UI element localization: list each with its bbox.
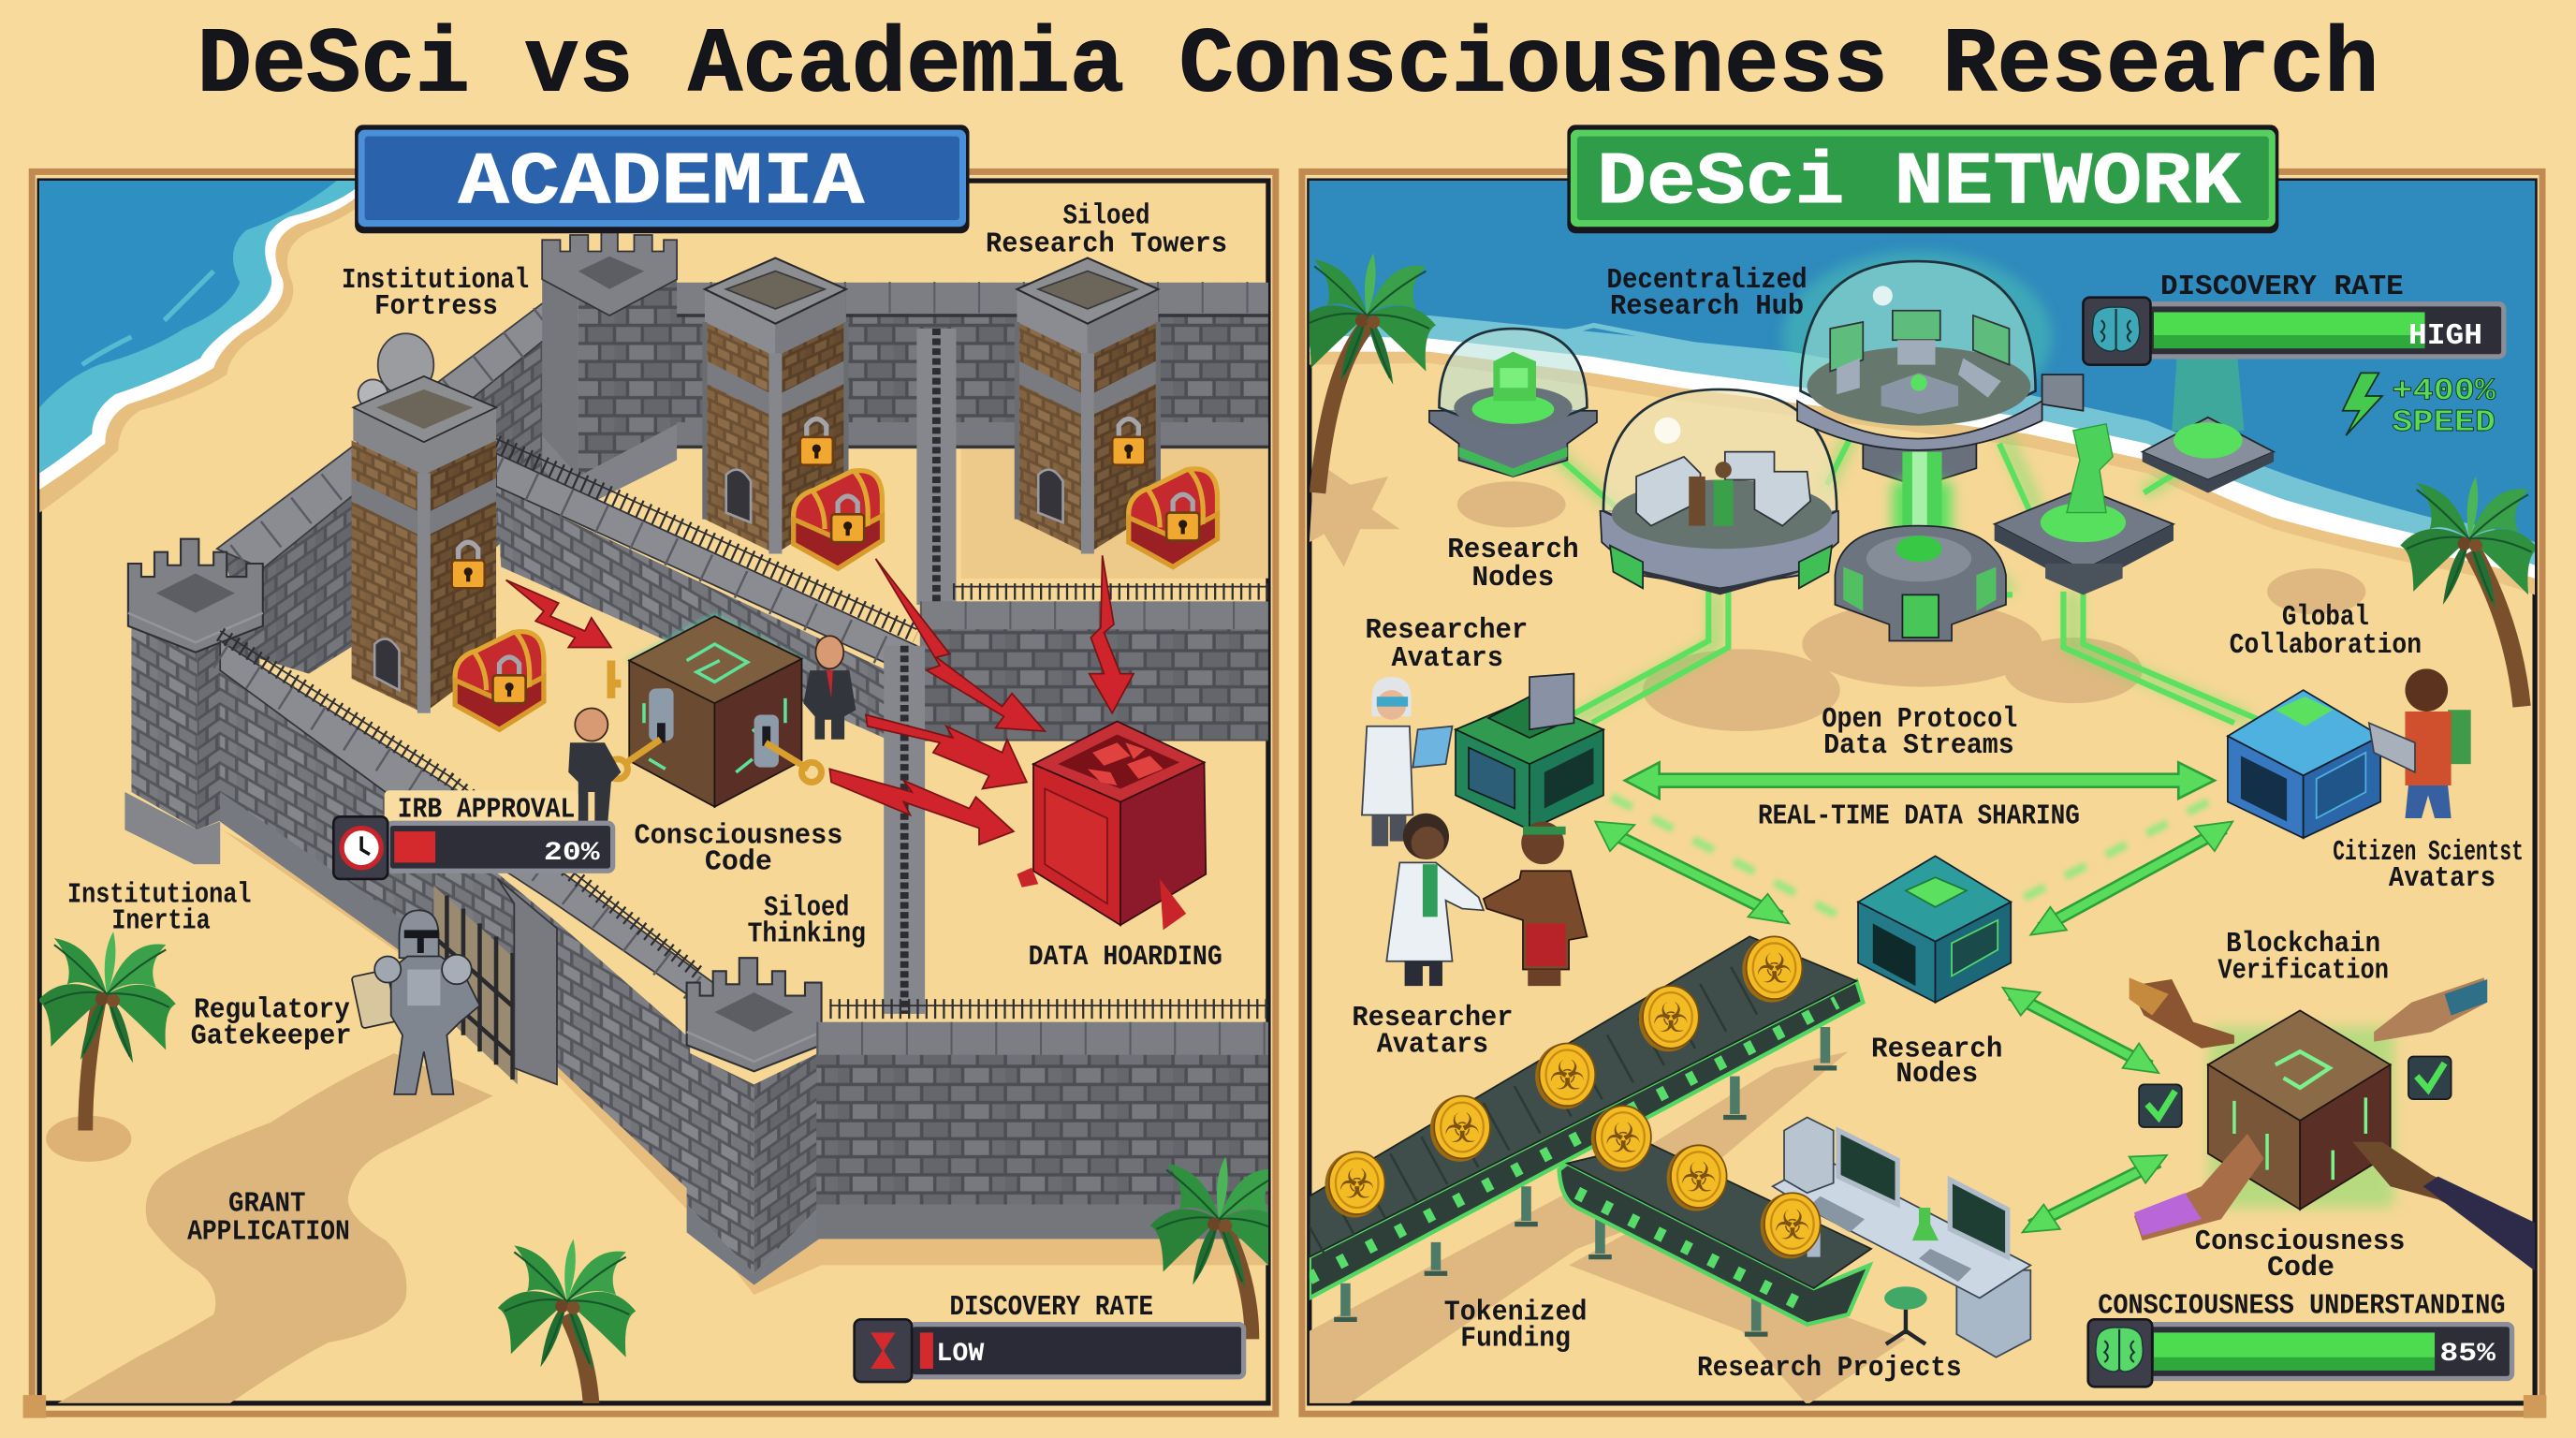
chest centre [794, 471, 882, 568]
sand shadows [1310, 460, 2365, 1405]
label: consciousness code [2195, 1225, 2405, 1284]
back wall [666, 283, 1268, 448]
palm right [2400, 477, 2539, 707]
label: institutional inertia: Institutional [67, 879, 252, 912]
chest right [1129, 469, 1218, 567]
small data platform [2143, 359, 2274, 493]
label: global collaboration: Collaboration [2230, 629, 2422, 662]
label: tokenized funding [1444, 1296, 1587, 1355]
siloed tower right [1017, 258, 1158, 553]
palm right [1150, 1157, 1288, 1339]
lock right [1112, 419, 1145, 465]
IRB approval bar [333, 790, 613, 879]
label: researcher avatars top: Avatars [1392, 642, 1503, 675]
label: institutional inertia [67, 879, 252, 938]
lock front [452, 542, 485, 588]
low discovery-rate bar [855, 1291, 1244, 1382]
arrow: right node to centre node [2030, 822, 2232, 935]
administrator figure right [803, 636, 856, 740]
label: researcher avatars bottom: Researcher [1352, 1002, 1513, 1034]
label: research projects: Research Projects [1697, 1352, 1962, 1385]
label: consciousness code: Consciousness [2195, 1225, 2405, 1258]
funding coin 4 [1639, 986, 1699, 1051]
icon: cyan brain [2092, 307, 2140, 351]
research workstations [1773, 1117, 2030, 1357]
label: global collaboration: Global [2282, 601, 2369, 634]
arrow: real-time data sharing [1625, 762, 2215, 799]
label: siloed thinking [748, 892, 866, 951]
consciousness understanding bar [2088, 1289, 2512, 1387]
banner: desci network: DeSci NETWORK [1597, 140, 2242, 225]
label: research nodes centre: Research [1871, 1034, 2002, 1066]
main research dome [1600, 389, 1838, 594]
label: grant application: APPLICATION [187, 1215, 350, 1248]
label: global collaboration [2230, 601, 2422, 662]
label: blockchain verification [2217, 928, 2389, 987]
conveyor research projects [1559, 1144, 1871, 1334]
panel: desci [1298, 171, 2546, 1418]
discovery rate bar high [2083, 271, 2504, 365]
funding coin 7 [1667, 1145, 1727, 1211]
red arrow 1 [506, 580, 611, 648]
funding coin 3 [1535, 1043, 1595, 1109]
red safe: data hoarding [1017, 721, 1206, 930]
label: consciousness code: Code [705, 845, 772, 878]
consciousness understanding bar: 85% [2439, 1340, 2496, 1369]
label: grant application [187, 1188, 350, 1248]
red arrow 3 [1090, 555, 1134, 713]
label: discovery rate: DISCOVERY RATE [949, 1291, 1153, 1324]
label: decentralized research hub: Research Hub [1610, 290, 1804, 323]
label: institutional fortress: Institutional [342, 264, 529, 297]
administrator figure left [568, 708, 621, 822]
panel frame: desci [1302, 171, 2546, 1418]
label: discovery rate: DISCOVERY RATE [2160, 271, 2404, 303]
scientist avatar [1362, 677, 1453, 846]
indigenous collaborator avatar [1484, 822, 1587, 986]
label: citizen scientist avatars: Avatars [2389, 862, 2496, 895]
label: consciousness code: Code [2267, 1252, 2334, 1284]
inner right wall [920, 587, 1268, 741]
inner diagonal wall [496, 439, 916, 740]
desci beach scene [1298, 181, 2539, 1405]
tower 1 with dish [352, 333, 496, 713]
academia beach scene [37, 181, 1288, 1406]
iron gate [433, 879, 557, 1084]
palm left [37, 932, 176, 1162]
funding coin 5 [1742, 936, 1802, 1003]
network node left [1456, 674, 1603, 829]
red arrow 4 [866, 714, 1027, 788]
panel frame: academia [23, 171, 1276, 1418]
label: open protocol data streams: Data Streams [1823, 729, 2014, 762]
network node centre [1858, 856, 2011, 1003]
label: regulatory gatekeeper: Regulatory [194, 993, 350, 1026]
palm left [1298, 253, 1436, 493]
data flow trails [1612, 797, 2208, 920]
banner: academia: ACADEMIA [459, 140, 865, 225]
label: regulatory gatekeeper [191, 993, 352, 1052]
icon: lightning bolt [2343, 373, 2382, 435]
red arrow 5 [829, 769, 1014, 844]
label: consciousness code: Consciousness [634, 819, 842, 852]
siloed tower centre [705, 258, 846, 553]
lock centre [800, 419, 833, 465]
label: siloed thinking: Thinking [748, 918, 866, 951]
label: institutional fortress: Fortress [374, 290, 498, 323]
banner: desci network [1567, 125, 2278, 233]
funding coin 2 [1430, 1096, 1490, 1162]
corner tower left [124, 539, 263, 864]
label: open protocol data streams: Open Protocol [1822, 703, 2017, 736]
chest front [455, 632, 544, 729]
conveyor tokenized funding [1310, 936, 1863, 1319]
front wall [816, 1005, 1268, 1239]
castle tower top [542, 230, 677, 509]
chain post [916, 329, 956, 605]
IRB label backing [385, 790, 578, 822]
corner tower right [687, 958, 822, 1284]
speed boost callout [2343, 373, 2496, 441]
red arrow 2 [875, 559, 1045, 731]
decentralized research hub dome [1782, 252, 2083, 487]
label: grant application: GRANT [228, 1188, 305, 1221]
label: decentralized research hub [1606, 264, 1808, 323]
data streams [1553, 435, 2259, 723]
label: siloed research towers [986, 200, 1227, 261]
label: blockchain verification: Blockchain [2226, 928, 2380, 961]
label: researcher avatars top [1365, 614, 1528, 675]
knight gatekeeper [351, 910, 479, 1094]
label: siloed thinking: Siloed [764, 892, 849, 925]
low discovery-rate bar: LOW [936, 1340, 984, 1369]
holo platform [1995, 424, 2174, 594]
label: citizen scientist avatars [2333, 836, 2524, 895]
label: consciousness code [634, 819, 842, 878]
verification cube with hands [2130, 977, 2539, 1273]
funding coin 1 [1325, 1152, 1385, 1218]
panel: academia [23, 171, 1288, 1418]
IRB approval bar: 20% [544, 839, 600, 868]
label: research nodes top: Nodes [1472, 562, 1554, 594]
arrow: centre node to verification cube [2002, 988, 2159, 1073]
arrow: verification cube to research projects [2023, 1155, 2167, 1232]
label: research nodes top: Research [1447, 534, 1579, 566]
researcher avatar shaking hands [1386, 814, 1484, 986]
label: decentralized research hub: Decentralized [1606, 264, 1808, 297]
network node right [2228, 690, 2380, 838]
ocean [1310, 181, 2535, 594]
label: tokenized funding: Tokenized [1444, 1296, 1587, 1328]
label: institutional inertia: Inertia [111, 905, 211, 938]
label: researcher avatars bottom [1352, 1002, 1513, 1061]
vertical chain post [884, 646, 925, 1014]
label: real-time data sharing: REAL-TIME DATA SHARING [1758, 800, 2080, 832]
banner: academia [355, 125, 970, 233]
funding coin 6 [1591, 1106, 1651, 1171]
label: open protocol data streams [1822, 703, 2017, 762]
ocean [39, 181, 381, 513]
title: DeSci vs Academia Consciousness Research [198, 14, 2378, 119]
central beam and pedestal [1835, 452, 2006, 640]
speed boost callout: SPEED [2392, 405, 2496, 441]
arrow: left node to centre node [1595, 822, 1789, 923]
front-left wall [220, 631, 713, 1191]
label: tokenized funding: Funding [1460, 1322, 1571, 1355]
label: data hoarding: DATA HOARDING [1029, 941, 1222, 974]
label: IRB approval: IRB APPROVAL [398, 793, 575, 826]
label: researcher avatars bottom: Avatars [1377, 1028, 1488, 1061]
discovery rate bar high: HIGH [2408, 320, 2482, 353]
label: researcher avatars top: Researcher [1365, 614, 1528, 647]
funding coin 8 [1761, 1193, 1821, 1258]
label: research nodes top [1447, 534, 1579, 594]
icon: green brain [2096, 1328, 2143, 1372]
label: siloed research towers: Siloed [1063, 200, 1150, 233]
speed boost callout: +400% [2392, 374, 2496, 409]
palm middle [498, 1239, 636, 1406]
sand shadows and path [57, 447, 1268, 1403]
label: siloed research towers: Research Towers [986, 228, 1227, 261]
label: blockchain verification: Verification [2217, 954, 2389, 987]
small research dome [1429, 329, 1597, 477]
upper wall [217, 298, 578, 674]
label: regulatory gatekeeper: Gatekeeper [191, 1020, 352, 1052]
label: research nodes centre [1871, 1034, 2002, 1091]
label: research nodes centre: Nodes [1895, 1058, 1978, 1091]
consciousness code cube [607, 613, 822, 807]
label: consciousness understanding: CONSCIOUSNESS UNDERSTANDING [2098, 1289, 2506, 1322]
citizen scientist avatar [2369, 668, 2471, 818]
label: institutional fortress [342, 264, 529, 323]
